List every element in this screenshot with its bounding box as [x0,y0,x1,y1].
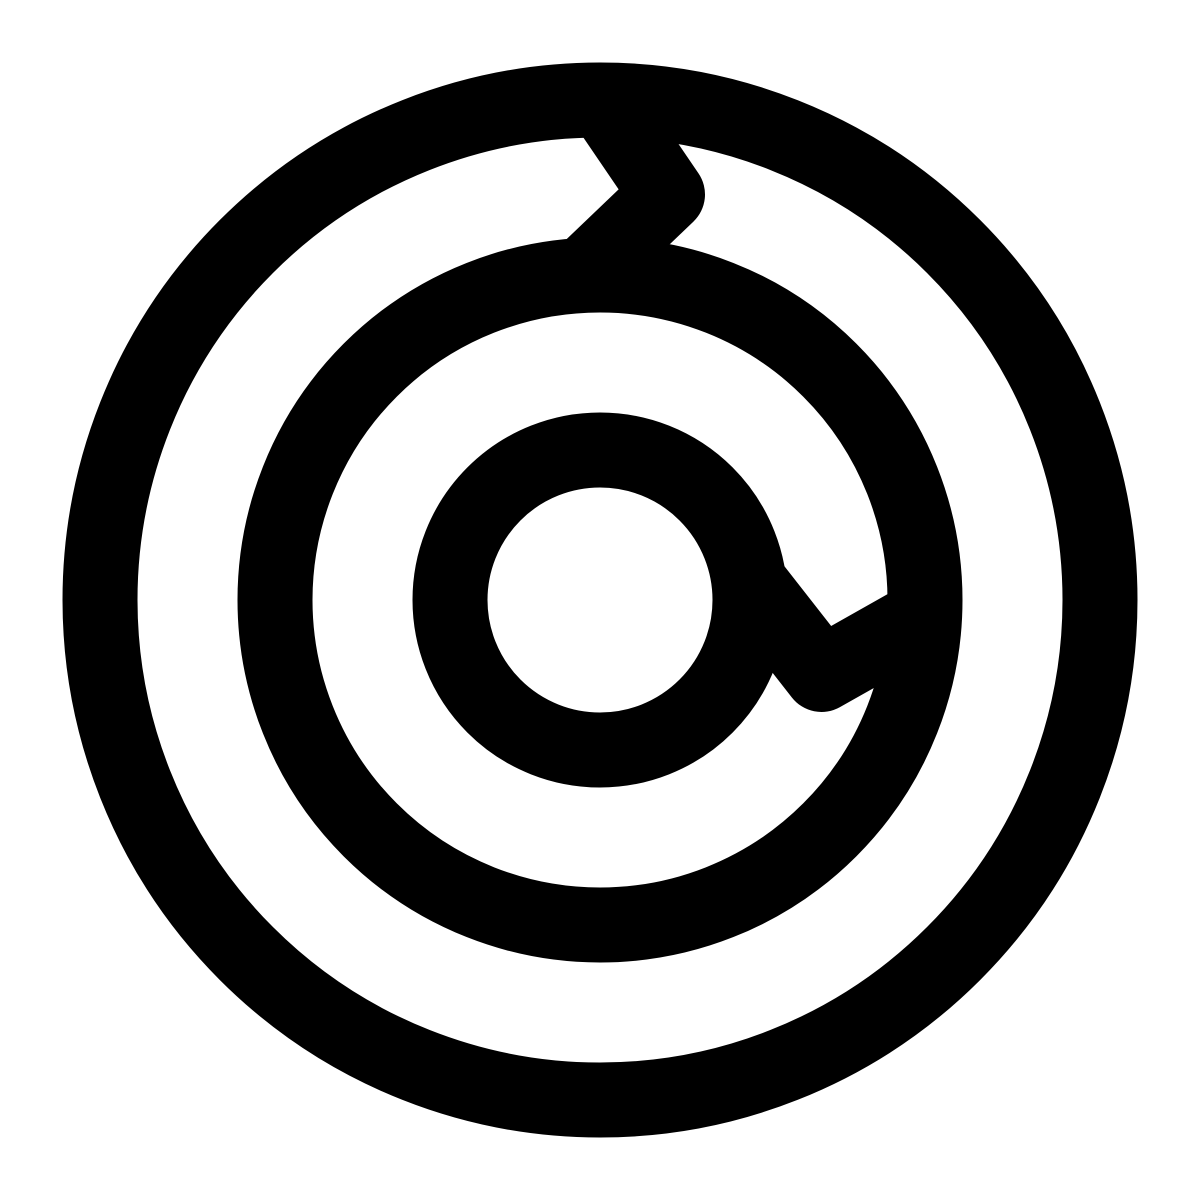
outer ring [100,100,1100,1100]
right zigzag connector [746,578,926,674]
middle ring [275,275,925,925]
top zigzag connector [575,110,668,283]
inner ring [450,450,750,750]
